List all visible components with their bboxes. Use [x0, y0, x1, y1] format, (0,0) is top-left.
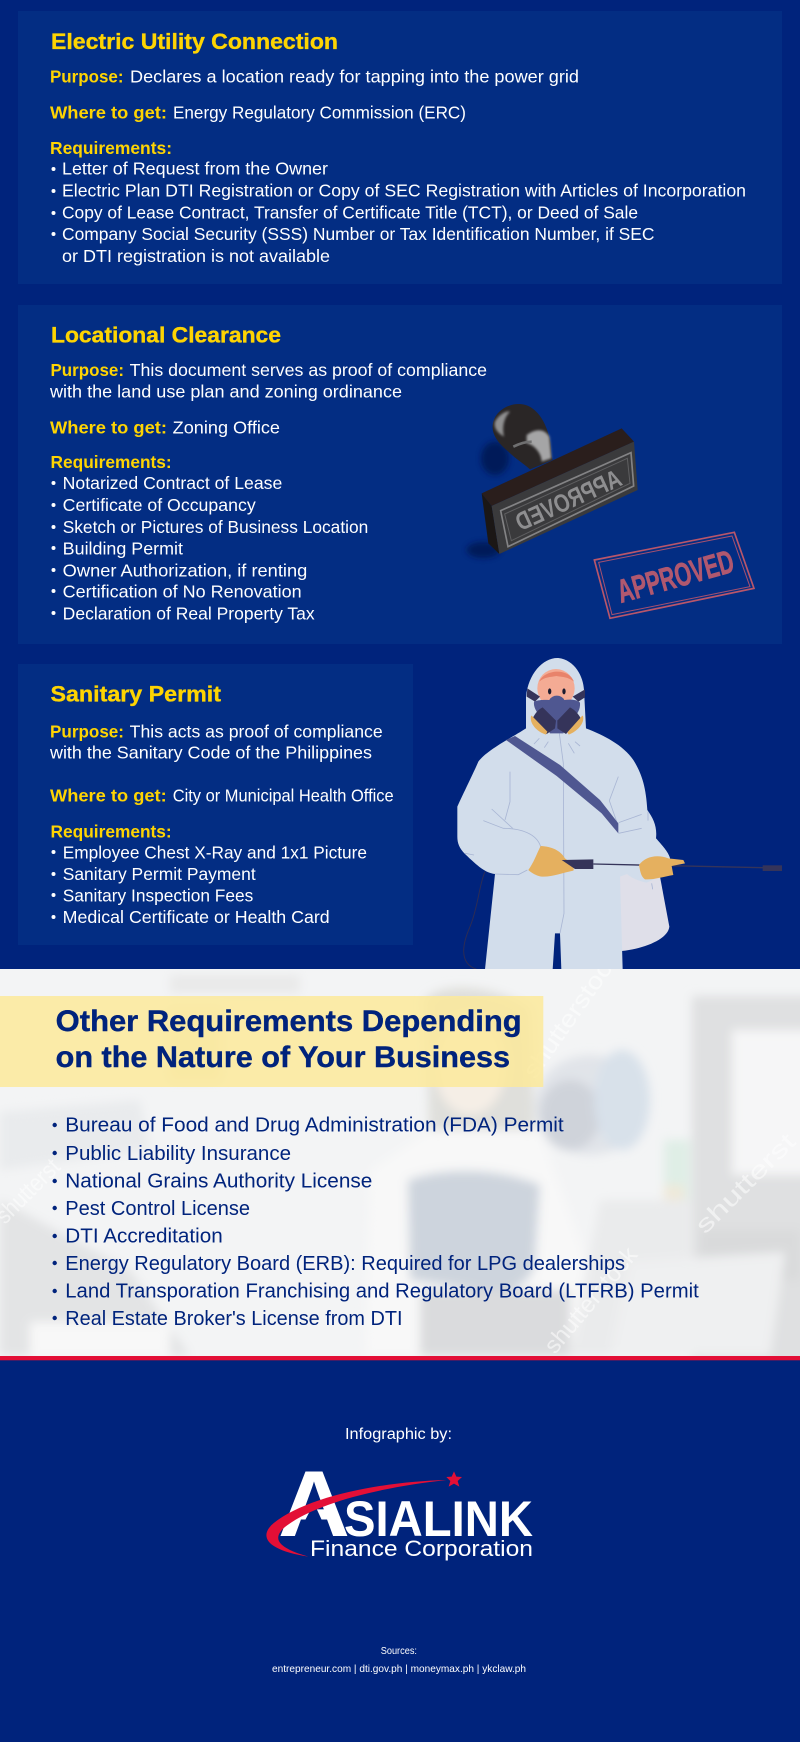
- requirements list: Sketch or Pictures of Business Location: [63, 517, 368, 537]
- other requirements list: Land Transporation Franchising and Regulatory Board (LTFRB) Permit: [65, 1281, 699, 1303]
- sources: Sources:: [381, 1645, 417, 1657]
- logo: asialink finance corporation: A: [278, 1451, 350, 1556]
- photo watermarks: shutterst: [690, 1128, 800, 1239]
- requirements list: Certification of No Renovation: [63, 581, 302, 601]
- where to get text: [50, 417, 280, 437]
- requirements label: Requirements:: [50, 452, 172, 472]
- strap: [506, 736, 618, 833]
- blurred workshop photo background: [0, 944, 800, 1366]
- requirements list: Building Permit: [63, 538, 183, 558]
- illustration: worker in protective suit with sprayer: [457, 658, 782, 969]
- purpose text: with the land use plan and zoning ordinance: [49, 381, 402, 401]
- requirements list: Owner Authorization, if renting: [63, 560, 307, 580]
- panel background: [18, 11, 782, 284]
- purpose text: Declares a location ready for tapping into the power grid: [130, 67, 579, 87]
- panel background: [18, 305, 782, 644]
- photo watermarks: [0, 1160, 766, 1534]
- stamp block: [482, 428, 638, 554]
- where to get text: Where to get:: [50, 785, 167, 805]
- heading banner: [0, 996, 543, 1087]
- purpose text: Purpose:: [50, 721, 124, 741]
- other requirements list: Energy Regulatory Board (ERB): Required for LPG dealerships: [65, 1253, 625, 1275]
- other requirements list: Public Liability Insurance: [65, 1143, 291, 1165]
- face: [537, 669, 575, 708]
- requirements list: Letter of Request from the Owner: [62, 159, 328, 179]
- other requirements list: [52, 1115, 699, 1330]
- heading: other requirements: [56, 1005, 522, 1074]
- where to get text: Zoning Office: [173, 417, 280, 437]
- icon: rubber stamp with approved imprint: [467, 404, 754, 618]
- requirements list: [52, 842, 367, 927]
- requirements list: Electric Plan DTI Registration or Copy of SEC Registration with Articles of Incorporation: [62, 181, 746, 201]
- arm sleeve: [618, 835, 670, 883]
- where to get text: Where to get:: [50, 417, 167, 437]
- heading: other requirements: Other Requirements Depending: [56, 1005, 522, 1038]
- purpose text: Purpose:: [50, 360, 124, 380]
- logo: asialink finance corporation: [266, 1451, 533, 1561]
- sources: [272, 1645, 526, 1675]
- panel background: [18, 664, 413, 945]
- requirements list: Employee Chest X-Ray and 1x1 Picture: [63, 842, 367, 862]
- requirements list: Declaration of Real Property Tax: [63, 603, 315, 623]
- panel: sanitary permit: [18, 664, 413, 945]
- requirements list: Sanitary Permit Payment: [63, 864, 256, 884]
- heading: sanitary permit: Sanitary Permit: [50, 682, 222, 707]
- requirements list: Copy of Lease Contract, Transfer of Certificate Title (TCT), or Deed of Sale: [62, 203, 638, 223]
- stamp shadow: [467, 442, 509, 558]
- other requirements list: Real Estate Broker's License from DTI: [65, 1308, 403, 1330]
- purpose text: [49, 721, 383, 762]
- requirements list: [52, 159, 746, 266]
- requirements list: or DTI registration is not available: [62, 246, 330, 266]
- requirements list: Sanitary Inspection Fees: [63, 885, 254, 905]
- sources: entrepreneur.com | dti.gov.ph | moneymax.ph | ykclaw.ph: [272, 1663, 526, 1675]
- purpose text: This document serves as proof of compliance: [130, 360, 487, 380]
- photo watermarks: shutterstock: [539, 1241, 644, 1359]
- where to get text: Where to get:: [50, 103, 167, 123]
- purpose text: with the Sanitary Code of the Philippines: [49, 742, 372, 762]
- approved imprint: [594, 532, 754, 618]
- requirements list: Company Social Security (SSS) Number or Tax Identification Number, if SEC: [62, 224, 654, 244]
- where to get text: [50, 103, 466, 123]
- where to get text: [50, 785, 394, 805]
- requirements label: Requirements:: [50, 821, 172, 841]
- other requirements list: Pest Control License: [65, 1198, 250, 1220]
- other requirements list: Bureau of Food and Drug Administration (FDA) Permit: [65, 1115, 564, 1137]
- requirements list: Certificate of Occupancy: [63, 495, 256, 515]
- requirements list: Medical Certificate or Health Card: [63, 907, 330, 927]
- where to get text: City or Municipal Health Office: [173, 785, 394, 805]
- purpose text: [49, 360, 487, 401]
- requirements list: [52, 473, 368, 623]
- suit fold lines: [465, 733, 653, 933]
- red divider stripe: [0, 1356, 800, 1360]
- suit body: [457, 658, 670, 969]
- other requirements list: DTI Accreditation: [65, 1226, 223, 1248]
- respirator mask: [527, 688, 585, 735]
- heading: other requirements: on the Nature of Your Business: [56, 1041, 510, 1074]
- right glove: [639, 856, 685, 879]
- other requirements list: National Grains Authority License: [65, 1171, 372, 1193]
- hose: [464, 872, 485, 969]
- requirements label: Requirements:: [50, 138, 172, 158]
- logo: asialink finance corporation: Finance Corporation: [310, 1536, 533, 1561]
- heading: locational clearance: Locational Clearance: [51, 323, 281, 348]
- panel: electric utility connection: [18, 11, 782, 284]
- photo watermarks: shutterstock: [518, 944, 627, 1083]
- section: other requirements: [0, 944, 800, 1366]
- panel: locational clearance: [18, 305, 782, 644]
- purpose text: This acts as proof of compliance: [130, 721, 383, 741]
- left glove: [528, 846, 574, 877]
- where to get text: Energy Regulatory Commission (ERC): [173, 103, 466, 123]
- approved imprint: APPROVED: [613, 542, 738, 610]
- heading: electric utility connection: Electric Utility Connection: [51, 29, 338, 54]
- stamp handle: [493, 404, 553, 469]
- backpack: [617, 833, 669, 951]
- requirements list: Notarized Contract of Lease: [63, 473, 282, 493]
- purpose text: Purpose:: [50, 67, 124, 87]
- footer: [266, 1426, 533, 1675]
- mirrored stamp text: APPROVED: [511, 464, 626, 537]
- logo: asialink finance corporation: SIALINK: [344, 1491, 533, 1547]
- sprayer wand: [562, 859, 782, 871]
- infographic credit: Infographic by:: [345, 1426, 452, 1443]
